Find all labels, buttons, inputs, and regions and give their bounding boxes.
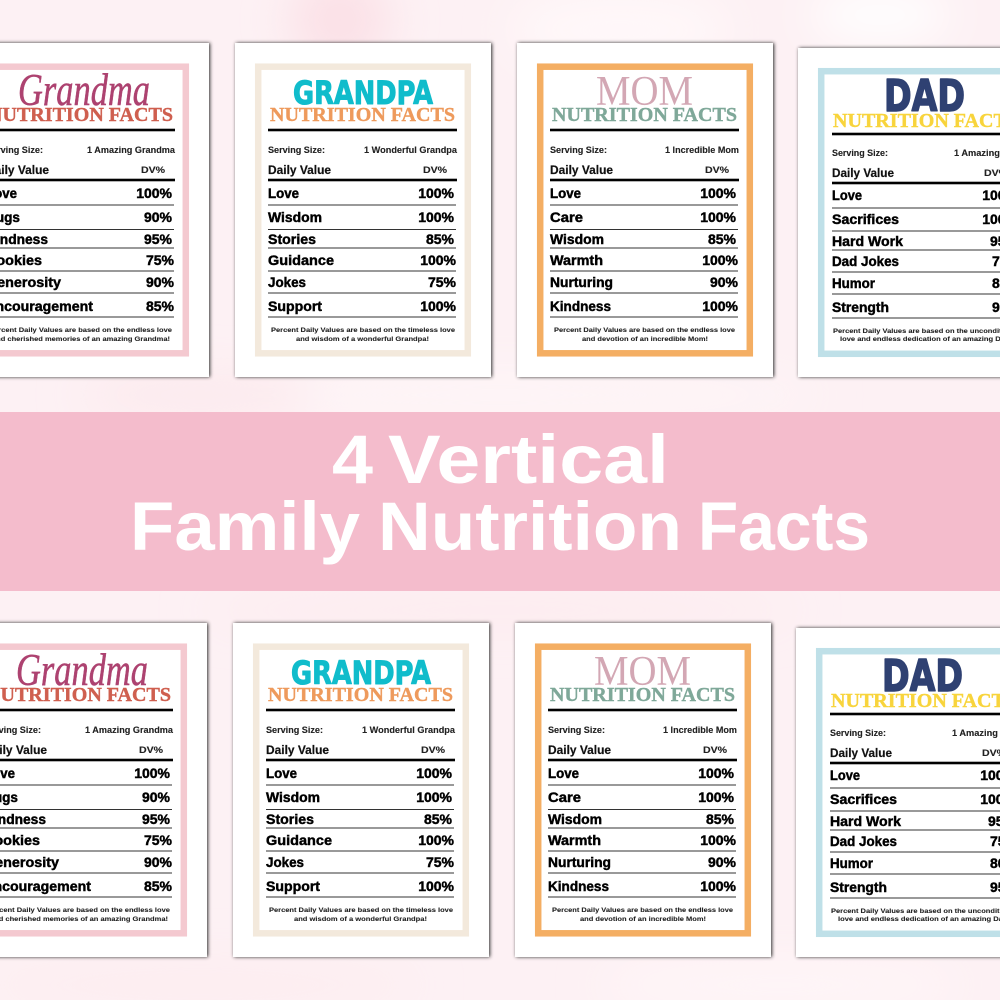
serving label: Serving Size: <box>548 725 605 735</box>
top rule <box>832 133 1000 135</box>
nutrition rows: 90% <box>710 274 739 290</box>
footnote <box>554 327 735 343</box>
banner <box>0 412 1000 591</box>
nutrition rows: Warmth <box>550 252 603 268</box>
daily value header: Daily Value <box>830 746 892 760</box>
card: Dad bottom <box>796 628 1000 957</box>
nutrition rows: 85% <box>146 298 175 314</box>
title: GRANDPA <box>293 74 433 112</box>
nutrition rows: Jokes <box>268 274 306 290</box>
nutrition rows: 100% <box>416 789 453 805</box>
title: GRANDPA <box>291 654 431 692</box>
nutrition rows <box>832 187 1000 318</box>
serving value: 1 Incredible Mom <box>663 725 737 735</box>
nutrition rows <box>268 185 457 318</box>
serving value: 1 Wonderful Grandpa <box>364 145 458 155</box>
frame <box>258 67 468 353</box>
nutrition rows: 100% <box>702 298 739 314</box>
paper <box>798 48 1000 377</box>
nutrition rows: 85% <box>708 231 737 247</box>
footnote <box>552 907 733 923</box>
header rule <box>0 179 175 181</box>
nutrition rows: 100% <box>418 209 455 225</box>
nutrition rows: Kindness <box>550 298 611 314</box>
nutrition rows: 90% <box>142 789 171 805</box>
title: Grandma <box>16 644 148 695</box>
nutrition rows: Strength <box>832 299 889 315</box>
footnote: and wisdom of a wonderful Grandpa! <box>296 336 429 343</box>
nutrition rows: Sacrifices <box>832 211 899 227</box>
nutrition rows: Love <box>830 767 860 783</box>
footnote <box>0 327 172 343</box>
subtitle: NUTRITION FACTS <box>270 105 455 126</box>
footnote <box>833 328 1000 343</box>
paper <box>0 623 207 957</box>
card: Grandpa top <box>235 43 491 377</box>
heading line 1: 4 <box>332 421 373 498</box>
nutrition rows: 100% <box>700 209 737 225</box>
nutrition rows: 100% <box>700 185 737 201</box>
nutrition rows: Guidance <box>268 252 334 268</box>
nutrition rows: 100% <box>418 185 455 201</box>
title: MOM <box>596 69 693 115</box>
nutrition rows: 85% <box>706 811 735 827</box>
nutrition rows: 90% <box>708 854 737 870</box>
footnote <box>831 908 1000 923</box>
header rule <box>550 179 739 181</box>
nutrition rows: Love <box>268 185 299 201</box>
serving value: 1 Amazing Grandma <box>85 725 174 735</box>
serving label: Serving Size: <box>266 725 323 735</box>
nutrition rows: 100% <box>698 789 735 805</box>
nutrition rows: Love <box>266 765 297 781</box>
heading line 2: Family <box>130 488 360 565</box>
footnote: and devotion of an incredible Mom! <box>582 336 708 343</box>
footnote <box>271 327 455 343</box>
nutrition rows <box>550 185 739 318</box>
heading line 1: Vertical <box>388 421 669 498</box>
header rule <box>266 759 455 761</box>
nutrition rows: 100% <box>420 252 457 268</box>
nutrition rows: Hard Work <box>830 813 901 829</box>
nutrition rows: 100% <box>134 765 171 781</box>
frame <box>256 647 466 933</box>
nutrition rows: Love <box>548 765 579 781</box>
nutrition rows: Wisdom <box>268 209 322 225</box>
card: Dad top <box>798 48 1000 377</box>
footnote: Percent Daily Values are based on the unconditional <box>833 328 1000 335</box>
header rule <box>0 759 173 761</box>
paper <box>0 43 209 377</box>
paper <box>515 623 771 957</box>
footnote: Percent Daily Values are based on the timeless love <box>271 327 455 334</box>
footnote: Percent Daily Values are based on the endless love <box>554 327 735 334</box>
serving label: Serving Size: <box>832 148 888 158</box>
card: Grandma top <box>0 43 209 377</box>
nutrition rows: 90% <box>144 854 173 870</box>
nutrition rows: Wisdom <box>550 231 604 247</box>
nutrition rows <box>266 765 455 898</box>
card: Mom bottom <box>515 623 771 957</box>
paper <box>233 623 489 957</box>
nutrition rows: Strength <box>830 879 887 895</box>
frame <box>819 651 1000 934</box>
daily value header: Daily Value <box>550 163 613 177</box>
nutrition rows: 100% <box>420 298 457 314</box>
frame <box>821 71 1000 354</box>
nutrition rows: Humor <box>832 275 876 291</box>
top rule <box>550 129 739 131</box>
nutrition rows: Humor <box>830 855 874 871</box>
nutrition rows: 100% <box>700 878 737 894</box>
nutrition rows: Dad Jokes <box>832 253 899 269</box>
nutrition rows <box>830 767 1000 898</box>
title: Grandma <box>18 64 150 115</box>
nutrition rows <box>548 765 737 898</box>
nutrition rows: 75% <box>428 274 457 290</box>
nutrition rows: 95% <box>142 811 171 827</box>
header rule <box>830 762 1000 764</box>
banner band <box>0 412 1000 591</box>
dv percent header: DV% <box>705 165 729 175</box>
dv percent header: DV% <box>421 745 445 755</box>
card: Grandpa bottom <box>233 623 489 957</box>
nutrition rows: 85% <box>144 878 173 894</box>
footnote: love and endless dedication of an amazing Dad! <box>840 336 1000 343</box>
nutrition rows: Kindness <box>548 878 609 894</box>
footnote: Percent Daily Values are based on the timeless love <box>269 907 453 914</box>
card: Grandma bottom <box>0 623 207 957</box>
nutrition rows: Nurturing <box>550 274 613 290</box>
serving value: 1 Wonderful Grandpa <box>362 725 456 735</box>
daily value header: Daily Value <box>832 166 894 180</box>
paper <box>517 43 773 377</box>
nutrition rows: Guidance <box>266 832 332 848</box>
nutrition rows: Love <box>550 185 581 201</box>
nutrition rows: Jokes <box>266 854 304 870</box>
serving value: 1 Amazing Grandma <box>87 145 176 155</box>
nutrition rows: Dad Jokes <box>830 833 897 849</box>
frame <box>538 647 748 933</box>
dv percent header: DV% <box>141 165 165 175</box>
nutrition rows: 100% <box>136 185 173 201</box>
nutrition rows: Love <box>832 187 862 203</box>
header rule <box>548 759 737 761</box>
nutrition rows: 85% <box>424 811 453 827</box>
nutrition rows: 75% <box>144 832 173 848</box>
dv percent header: DV% <box>423 165 447 175</box>
nutrition rows: 100% <box>418 878 455 894</box>
title: DAD <box>882 651 963 702</box>
footnote: and wisdom of a wonderful Grandpa! <box>294 916 427 923</box>
nutrition rows: 100% <box>698 765 735 781</box>
nutrition rows: 100% <box>416 765 453 781</box>
nutrition rows: Care <box>548 789 581 805</box>
top rule <box>268 129 457 131</box>
top rule <box>0 709 173 711</box>
top rule <box>0 129 175 131</box>
nutrition rows: 90% <box>146 274 175 290</box>
card: Mom top <box>517 43 773 377</box>
footnote: and devotion of an incredible Mom! <box>580 916 706 923</box>
footnote <box>0 907 170 923</box>
daily value header: Daily Value <box>268 163 331 177</box>
dv percent header: DV% <box>139 745 163 755</box>
nutrition rows: Hard Work <box>832 233 903 249</box>
nutrition rows: Support <box>268 298 322 314</box>
nutrition rows: 100% <box>700 832 737 848</box>
title: DAD <box>884 71 965 122</box>
nutrition rows: 100% <box>418 832 455 848</box>
nutrition rows: Stories <box>268 231 316 247</box>
footnote <box>269 907 453 923</box>
nutrition rows: 90% <box>144 209 173 225</box>
frame <box>0 647 184 933</box>
heading line 2: Facts <box>698 488 870 565</box>
nutrition rows: Warmth <box>548 832 601 848</box>
top rule <box>266 709 455 711</box>
serving value: 1 Incredible Mom <box>665 145 739 155</box>
nutrition rows: Support <box>266 878 320 894</box>
title: MOM <box>594 649 691 695</box>
nutrition rows: Stories <box>266 811 314 827</box>
footnote: love and endless dedication of an amazing Dad! <box>838 916 1000 923</box>
paper <box>235 43 491 377</box>
nutrition rows: Sacrifices <box>830 791 897 807</box>
subtitle: NUTRITION FACTS <box>268 685 453 706</box>
serving label: Serving Size: <box>830 728 886 738</box>
footnote: Percent Daily Values are based on the endless love <box>552 907 733 914</box>
nutrition rows: Nurturing <box>548 854 611 870</box>
paper <box>796 628 1000 957</box>
nutrition rows: 75% <box>146 252 175 268</box>
top rule <box>548 709 737 711</box>
heading line 2 <box>130 488 870 565</box>
nutrition rows: 100% <box>702 252 739 268</box>
nutrition rows: 85% <box>426 231 455 247</box>
nutrition rows <box>0 185 175 318</box>
daily value header: Daily Value <box>266 743 329 757</box>
daily value header: Daily Value <box>548 743 611 757</box>
nutrition rows: Wisdom <box>548 811 602 827</box>
nutrition rows: 75% <box>426 854 455 870</box>
nutrition rows <box>0 765 173 898</box>
nutrition rows: 95% <box>144 231 173 247</box>
frame <box>0 67 186 353</box>
footnote: Percent Daily Values are based on the unconditional <box>831 908 1000 915</box>
header rule <box>832 182 1000 184</box>
heading line 2: Nutrition <box>378 488 682 565</box>
frame <box>540 67 750 353</box>
dv percent header: DV% <box>703 745 727 755</box>
header rule <box>268 179 457 181</box>
nutrition rows: Wisdom <box>266 789 320 805</box>
subtitle: NUTRITION FACTS <box>550 685 735 706</box>
serving label: Serving Size: <box>268 145 325 155</box>
top rule <box>830 713 1000 715</box>
serving label: Serving Size: <box>550 145 607 155</box>
subtitle: NUTRITION FACTS <box>552 105 737 126</box>
nutrition rows: Care <box>550 209 583 225</box>
